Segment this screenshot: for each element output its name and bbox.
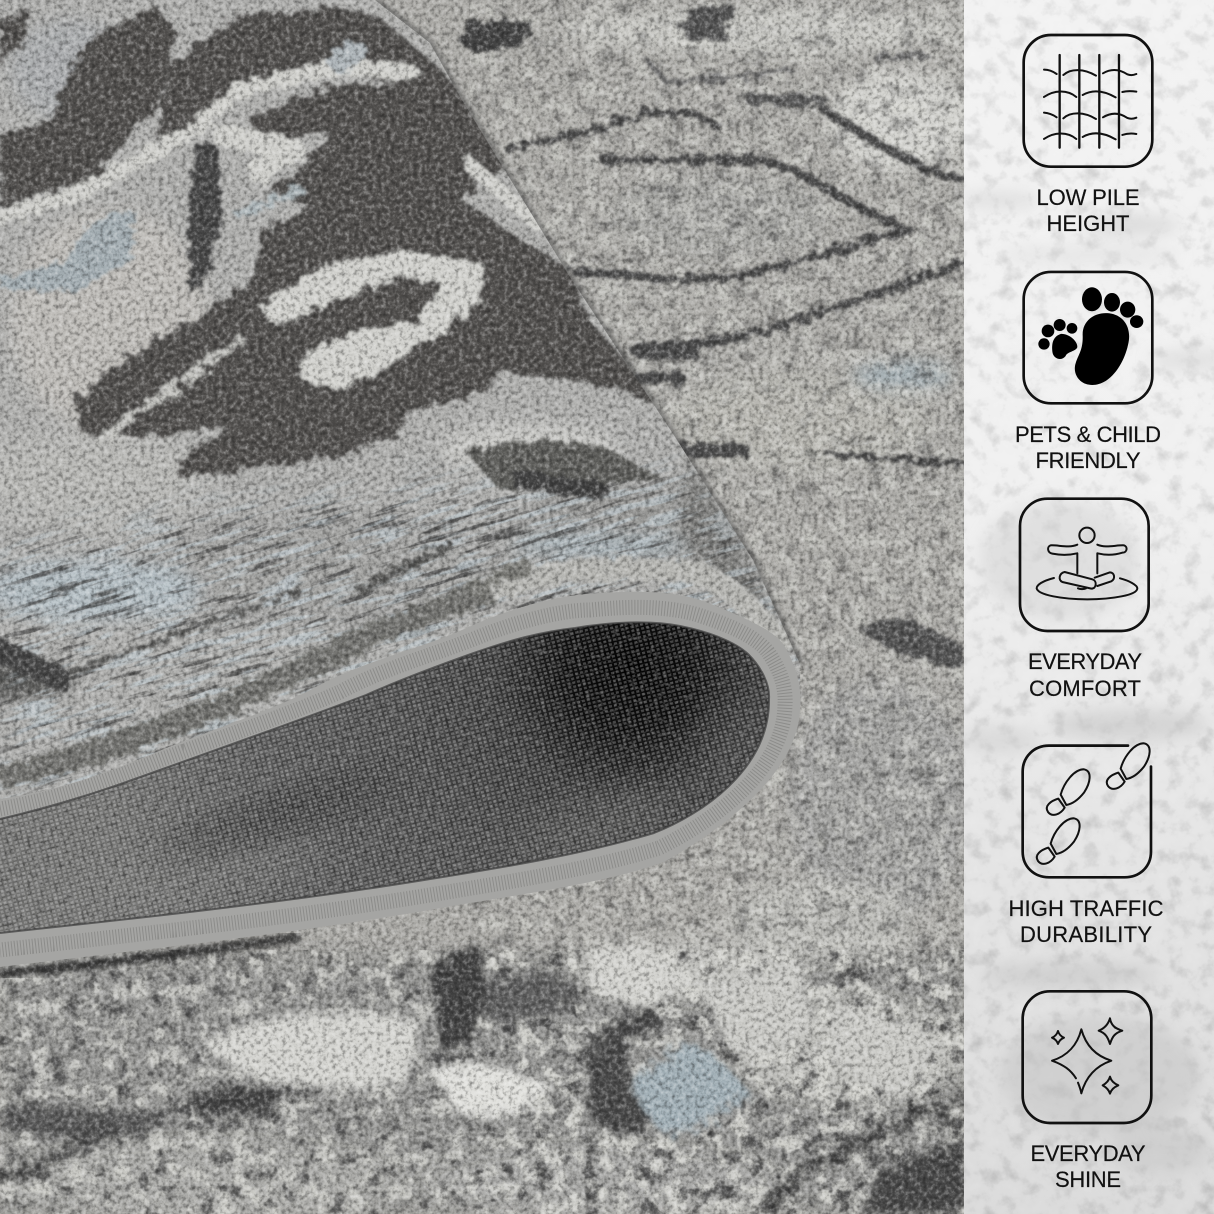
woven dark streaks	[0, 450, 800, 795]
label: low pile height: LOW PILE	[1036, 185, 1140, 210]
rolled rug fringe along binding	[0, 565, 790, 778]
icon: paw and foot	[1024, 272, 1152, 403]
label: everyday shine	[1030, 1141, 1146, 1192]
rug binding edge	[0, 592, 800, 967]
label: low pile height: HEIGHT	[1046, 211, 1130, 236]
rolled rug woven streak band	[0, 450, 800, 798]
label: everyday shine: SHINE	[1055, 1167, 1121, 1192]
woven light streaks	[0, 466, 800, 798]
lower rug light mottling	[0, 950, 964, 1214]
lower rug dark mottling	[0, 950, 964, 1214]
rolled rug dark flecks and streaks	[0, 480, 600, 700]
rug underside weave	[0, 610, 780, 940]
lower rug light patches	[203, 1013, 418, 1087]
lower rug blue patch	[630, 1042, 752, 1135]
label: pets and child friendly: PETS & CHILD	[1015, 422, 1161, 447]
label: low pile height	[1036, 185, 1140, 236]
weave stitches	[0, 610, 780, 940]
label: high traffic durability: HIGH TRAFFIC	[1008, 896, 1164, 921]
shadow below binding	[0, 937, 300, 974]
features panel	[960, 0, 1214, 1214]
lower rug dark lines	[0, 1097, 964, 1205]
flat rug tone areas	[0, 8, 970, 1214]
icon: everyday shine sparkles	[1023, 991, 1151, 1123]
rolled rug light leaf ring	[261, 250, 484, 390]
flat rug dark mottling	[470, 0, 964, 1214]
binding ribbing	[0, 607, 785, 950]
label: everyday comfort	[1028, 649, 1142, 701]
label: everyday shine: EVERYDAY	[1030, 1141, 1146, 1166]
flat rug dark blobs	[455, 20, 535, 55]
icon: high traffic footprints	[1023, 743, 1151, 877]
flat rug surface	[0, 0, 970, 1214]
rolled rug tone areas	[0, 212, 794, 708]
panel background	[960, 0, 1214, 1214]
label: everyday comfort: COMFORT	[1029, 676, 1141, 701]
label: pets and child friendly	[1015, 422, 1161, 473]
rolled rug light strokes	[0, 52, 540, 440]
label: pets and child friendly: FRIENDLY	[1036, 448, 1141, 473]
label: high traffic durability	[1008, 896, 1164, 947]
flat rug dark line motif	[507, 56, 964, 464]
lower rug dark motif	[0, 945, 964, 1214]
label: everyday comfort: EVERYDAY	[1028, 649, 1142, 674]
rolled rug top surface	[0, 0, 800, 799]
rolled rug dark pattern	[0, 7, 665, 490]
roll cast shadow	[375, 0, 800, 664]
flat rug light mottling	[470, 0, 964, 1214]
icon: low pile weave	[1024, 35, 1152, 167]
icon: everyday comfort yoga figure	[1020, 499, 1149, 631]
label: high traffic durability: DURABILITY	[1020, 922, 1152, 947]
rolled rug blue accent	[0, 208, 135, 290]
